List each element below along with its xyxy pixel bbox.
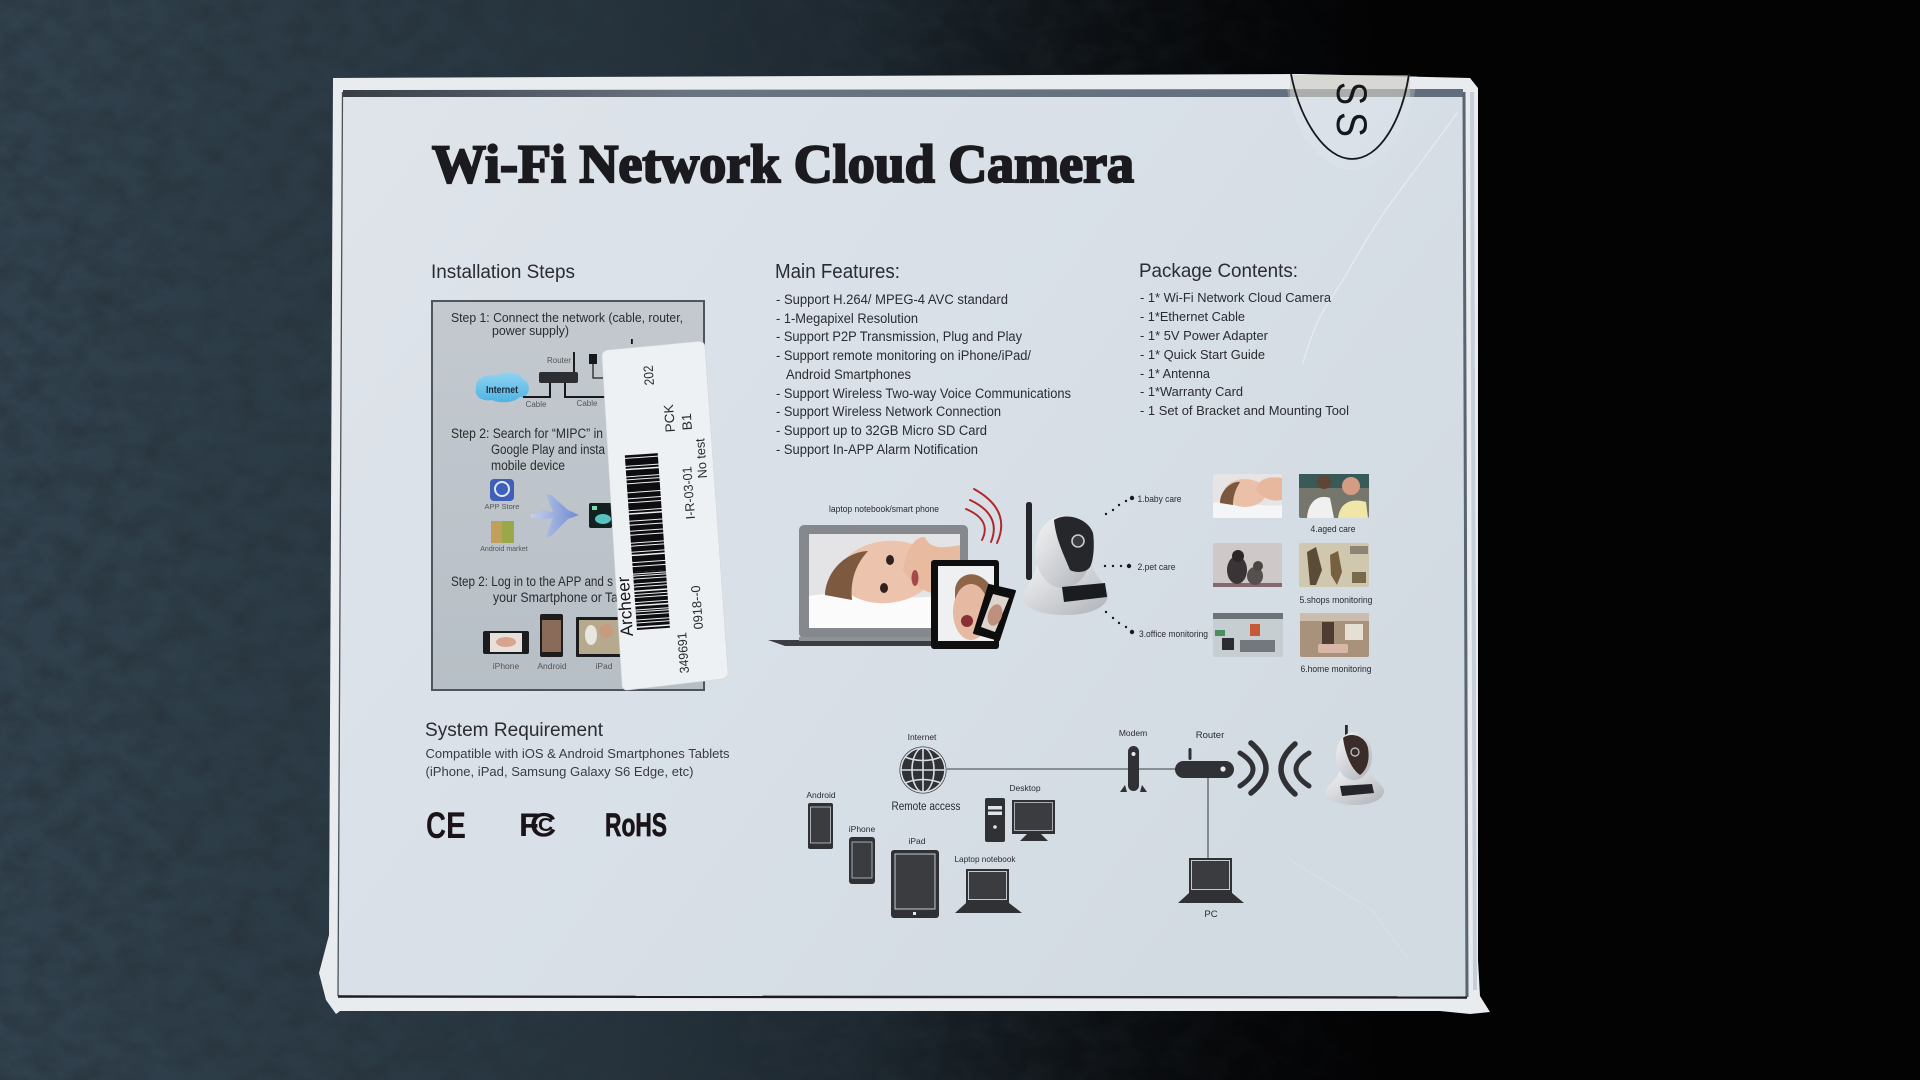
text block: main features [775, 261, 1071, 457]
icon: smartphone [974, 585, 1015, 640]
thumbnail: office monitoring [1213, 613, 1283, 657]
text block: main features: - Support In-APP Alarm Notification [776, 442, 978, 457]
mark: CE [426, 805, 466, 846]
icon: iphone: iPhone [849, 824, 876, 834]
text block: package contents [1139, 260, 1349, 418]
icon: mipc app [589, 503, 612, 528]
icon: small camera [1326, 725, 1384, 805]
step 2 text: Google Play and insta [491, 442, 605, 457]
text block: system requirement: (iPhone, iPad, Samsung Galaxy S6 Edge, etc) [426, 764, 694, 779]
text block: package contents: - 1*Ethernet Cable [1140, 309, 1245, 324]
text block: main features: - Support remote monitoring on iPhone/iPad/ [776, 348, 1031, 363]
icon: pc laptop [1178, 858, 1244, 920]
label text: No test [692, 438, 710, 479]
icon: internet globe [892, 732, 961, 813]
thumbnail: shops monitoring [1299, 543, 1369, 587]
step 3 text: Step 2: Log in to the APP and s [451, 574, 613, 589]
label: pet care: 2.pet care [1138, 562, 1176, 573]
thumbnail: aged care [1299, 474, 1369, 518]
label text: 202 [641, 365, 657, 386]
text block: main features: - Support up to 32GB Micro SD Card [776, 423, 987, 438]
devices row [483, 614, 623, 671]
use-case dotted connectors [1104, 496, 1134, 634]
step 1 text [451, 310, 683, 338]
text block: main features: - Support Wireless Two-way Voice Communications [776, 386, 1071, 401]
step 1 network diagram: Cable [577, 399, 598, 408]
step 1 network diagram: Router [547, 356, 571, 365]
step 2 text: mobile device [491, 458, 565, 473]
step 3 text [451, 574, 618, 605]
mark: CE: C [426, 805, 446, 846]
icon: ipad: iPad [908, 836, 926, 846]
text block: package contents: - 1* 5V Power Adapter [1140, 328, 1269, 343]
text block: main features: Main Features: [775, 261, 900, 283]
label text: 0918--0 [688, 585, 706, 630]
label: home monitoring: 6.home monitoring [1300, 664, 1372, 675]
panel: installation steps [432, 301, 704, 690]
text block: main features: - Support P2P Transmission, Plug and Play [776, 329, 1022, 344]
mark: RoHS: RoHS [605, 807, 667, 843]
icon: android market: Android market [480, 546, 528, 553]
mark: FCC: C [530, 807, 556, 843]
text block: system requirement: Compatible with iOS & Android Smartphones Tablets [426, 746, 730, 761]
icon: wifi waves [1240, 743, 1309, 794]
icon: desktop computer [985, 783, 1055, 842]
icon: app store [485, 479, 519, 511]
thumbnail: home monitoring [1300, 613, 1369, 657]
icon: laptop notebook [954, 854, 1022, 913]
icon: airplane [531, 494, 579, 537]
text block: package contents: - 1* Quick Start Guide [1140, 347, 1265, 362]
chart: laptop and mobile viewing: laptop notebook/smart phone [829, 504, 939, 515]
icon: pan-tilt camera [1023, 502, 1108, 615]
label text: I-R-03-01 [679, 466, 698, 520]
icon: ipad [891, 836, 939, 918]
thumbnail: baby care [1213, 474, 1282, 518]
step 1 network diagram: Cable [526, 400, 547, 409]
chart: laptop and mobile viewing [768, 489, 1015, 649]
sticker: barcode label [602, 341, 728, 690]
text block: package contents: Package Contents: [1139, 260, 1298, 282]
label text: PCK [661, 404, 678, 433]
label: shops monitoring: 5.shops monitoring [1300, 595, 1372, 606]
text block: main features: - 1-Megapixel Resolution [776, 311, 918, 326]
step 1 network diagram: Internet [486, 384, 518, 396]
seal sticker: SS [1285, 74, 1417, 170]
connection lines [947, 769, 1209, 858]
mark: FCC: C [538, 815, 553, 835]
label: aged care: 4.aged care [1310, 524, 1356, 535]
label: office monitoring: 3.office monitoring [1139, 629, 1208, 640]
box: white product carton [319, 74, 1490, 1014]
icon: modem [1119, 728, 1147, 792]
text block: main features: - Support Wireless Network Connection [776, 404, 1001, 419]
icon: laptop with baby image [768, 525, 968, 646]
text block: main features: Android Smartphones [786, 367, 911, 382]
text block: system requirement: System Requirement [425, 720, 604, 741]
icon: android phone: Android [806, 790, 836, 800]
text block: package contents: - 1* Wi-Fi Network Cloud Camera [1140, 290, 1332, 305]
icon: tablet [931, 560, 999, 649]
barcode [641, 454, 653, 629]
icon: router [1175, 730, 1234, 778]
icon: app store: APP Store [485, 502, 519, 511]
icon: iphone [849, 824, 876, 884]
icon: android phone [806, 790, 836, 849]
heading: installation steps: Installation Steps [431, 262, 575, 283]
devices row: iPhone [493, 661, 520, 671]
icon: laptop notebook: Laptop notebook [954, 854, 1016, 864]
devices row: Android [537, 661, 567, 671]
icon: router: Router [1196, 730, 1224, 741]
mark: FCC [519, 807, 556, 843]
icon: pc laptop: PC [1204, 909, 1218, 920]
step 1 network diagram [476, 339, 633, 409]
text block: system requirement [425, 720, 730, 779]
icon: desktop computer: Desktop [1009, 783, 1041, 793]
creases in shrink wrap [1290, 113, 1457, 960]
thumbnail: pet care [1213, 543, 1282, 587]
icon: internet globe: Internet [908, 732, 937, 742]
devices row: iPad [595, 661, 613, 671]
icon: red wireless arcs [966, 489, 1001, 543]
label text: Archeer [613, 576, 637, 637]
text block: package contents: - 1* Antenna [1140, 366, 1211, 381]
network diagram [806, 725, 1384, 920]
text block: package contents: - 1*Warranty Card [1140, 384, 1243, 399]
mark: CE: E [446, 805, 466, 846]
text block: package contents: - 1 Set of Bracket and Mounting Tool [1140, 403, 1349, 418]
label text [613, 365, 710, 674]
mark: FCC: F [519, 807, 539, 843]
icon: modem: Modem [1119, 728, 1147, 738]
label text: 349691 [674, 632, 692, 674]
icon: android market [480, 521, 528, 553]
label text: B1 [679, 413, 695, 431]
text block: main features: - Support H.264/ MPEG-4 AVC standard [776, 292, 1008, 307]
certification marks [426, 805, 667, 846]
step 1 text: power supply) [492, 323, 569, 338]
label: baby care: 1.baby care [1138, 494, 1182, 505]
step 2 text [451, 426, 605, 473]
step 1 text: Step 1: Connect the network (cable, router, [451, 310, 683, 325]
step 2 text: Step 2: Search for “MIPC” in [451, 426, 603, 441]
icon: internet globe: Remote access [892, 801, 961, 813]
step 3 text: your Smartphone or Ta [493, 590, 618, 605]
title: Wi-Fi Network Cloud Camera [432, 134, 1134, 194]
seal sticker: SS: S [1327, 112, 1375, 137]
seal sticker: SS: S [1327, 82, 1375, 105]
